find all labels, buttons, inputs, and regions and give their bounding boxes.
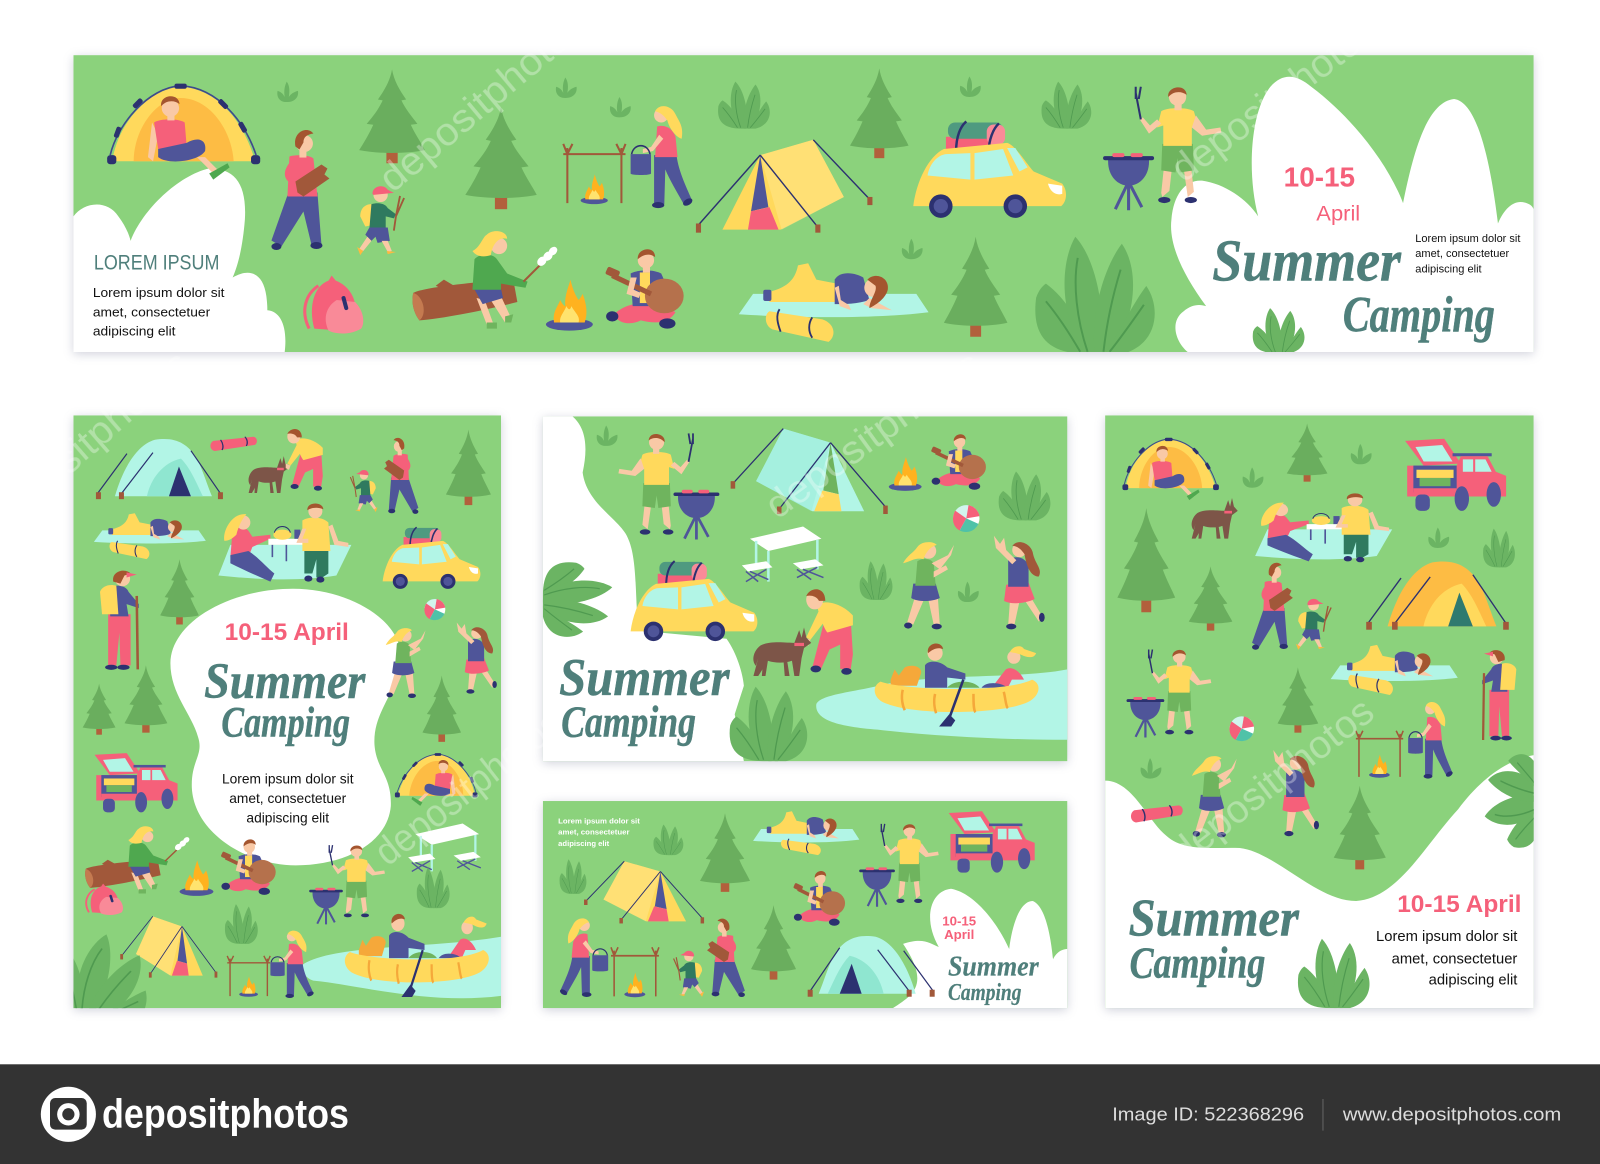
heading: lorem ipsum: LOREM IPSUM: [94, 250, 219, 274]
tuft: [960, 77, 981, 97]
body text: [222, 772, 354, 825]
tuft: [902, 239, 923, 259]
river: [302, 937, 501, 998]
dog: [753, 628, 811, 676]
tree: [1117, 508, 1175, 612]
grill: [309, 888, 343, 924]
tree: [751, 905, 796, 980]
white corner blob: [893, 889, 1067, 1008]
cooking frame: [227, 956, 270, 997]
body text: Lorem ipsum dolor sit: [1376, 929, 1517, 945]
girl playing: [903, 542, 954, 629]
watermarks: depositphotos: [758, 343, 989, 528]
icon: camera logo: [41, 1087, 96, 1142]
red car: [1405, 439, 1506, 511]
watermarks: [0, 4, 1385, 874]
leaf: [1485, 754, 1541, 848]
title: Camping: Camping: [221, 700, 350, 747]
ball: [953, 505, 980, 532]
bush: [653, 824, 683, 855]
tuft: [277, 82, 298, 102]
woman with pot: [1408, 702, 1454, 779]
man with guitar: [221, 839, 276, 895]
hiker: [100, 571, 139, 670]
ball: [424, 599, 445, 620]
red bag: [1131, 805, 1183, 822]
tuft: [597, 426, 618, 446]
footer bar: [0, 1064, 1600, 1164]
campfire: [180, 860, 213, 896]
title: Summer: Summer: [559, 649, 731, 707]
man with guitar: [931, 434, 986, 490]
title: Camping: Camping: [561, 697, 696, 747]
tree: [446, 430, 491, 505]
woman lying on mat: [739, 263, 929, 317]
tree: [1334, 786, 1386, 869]
cooking frame: [611, 947, 659, 997]
tree: [160, 559, 199, 624]
man with fork: [1136, 87, 1221, 203]
ball: [1230, 716, 1254, 741]
tuft: [556, 78, 577, 98]
body text: amet, consectetuer: [229, 791, 347, 806]
title: Camping: Camping: [1343, 288, 1495, 344]
red car: [949, 811, 1035, 873]
watermarks: depositphotos: [371, 4, 594, 201]
tree: [124, 665, 167, 733]
picnic couple: [218, 504, 351, 583]
man with fork: [881, 824, 939, 903]
panel: top banner: [73, 55, 1534, 354]
white centre blob: [170, 589, 400, 865]
date: [942, 914, 976, 942]
fire: [889, 457, 922, 491]
tuft: [1351, 444, 1372, 464]
tree: [850, 68, 909, 158]
text block: right: [1415, 233, 1520, 275]
girl on log with marshmallows: [412, 231, 559, 329]
text block: right: adipiscing elit: [1415, 263, 1482, 275]
girl playing: [1192, 756, 1237, 837]
tuft: [958, 582, 979, 602]
boy: [674, 951, 704, 997]
man carrying logs: [271, 130, 329, 250]
water: [816, 669, 1067, 740]
red car: [95, 753, 178, 812]
website: www.depositphotos.com: [1342, 1103, 1561, 1124]
panel shadows: [73, 57, 1534, 1010]
tree: [465, 107, 537, 209]
picnic couple: [1255, 493, 1392, 562]
small text: adipiscing elit: [558, 839, 610, 848]
raft: [345, 914, 489, 997]
cooking frame with fire: [563, 144, 626, 204]
raft: [875, 644, 1039, 727]
leaf: [543, 562, 612, 637]
icon: dome tent with person: [107, 84, 260, 180]
backpack: [86, 884, 123, 915]
small text: [558, 816, 640, 848]
sleeping bag: [766, 309, 833, 342]
girl playing: [457, 622, 497, 694]
tree: [83, 684, 116, 735]
watermarks: depositphotos: [1163, 690, 1382, 874]
body text: amet, consectetuer: [1392, 951, 1517, 967]
date: 10-15 April: [1397, 891, 1521, 918]
tree: [359, 69, 425, 163]
date: 10-15: [1284, 162, 1355, 193]
tree: [1287, 423, 1327, 482]
body text: adipiscing elit: [1429, 973, 1517, 989]
cooking frame: [1356, 731, 1403, 778]
girl on log: [85, 826, 191, 894]
bush: [718, 82, 770, 129]
girl playing: [386, 628, 426, 698]
text block: left: adipiscing elit: [93, 324, 176, 339]
tree: [422, 676, 461, 742]
panel: middle bottom: [543, 801, 1067, 1008]
table and chairs: [742, 527, 823, 582]
orange dome tent: [1366, 562, 1509, 630]
man with fork: [618, 433, 693, 535]
white bottom wave: [1105, 755, 1534, 1008]
title: Camping: Camping: [948, 979, 1021, 1006]
girl playing: [994, 536, 1045, 629]
panel: left poster: [73, 415, 501, 1008]
white blob: right title area: [1171, 77, 1534, 352]
dog: [249, 456, 289, 493]
man with logs: [1252, 563, 1293, 650]
bush on white: [1253, 308, 1304, 353]
date: 10-15 April: [225, 619, 349, 646]
tree: [1278, 667, 1318, 733]
body text: Lorem ipsum dolor sit: [222, 772, 354, 787]
text block: left: amet, consectetuer: [93, 304, 211, 319]
logo wordmark: depositphotos: [102, 1091, 349, 1137]
man with logs: [384, 438, 418, 514]
image id: Image ID: 522368296: [1112, 1103, 1304, 1124]
yellow ridge tent: [120, 916, 217, 978]
man bending: [286, 429, 323, 491]
large bush: [1035, 237, 1155, 354]
yellow car: [383, 527, 480, 589]
campfire: [546, 280, 593, 331]
girl playing: [1273, 750, 1319, 836]
man with fork: [329, 845, 385, 917]
tuft: [1243, 467, 1263, 488]
mint dome tent: [808, 936, 935, 997]
yellow bag: [109, 541, 149, 559]
month: April: [1316, 201, 1360, 225]
text block: right: amet, consectetuer: [1415, 248, 1510, 260]
boy: [1296, 599, 1331, 650]
tree: [944, 237, 1007, 337]
body text: [1376, 929, 1517, 989]
yellow car: [631, 561, 757, 641]
title: Summer: Summer: [1129, 890, 1300, 948]
text block: left: [93, 285, 225, 339]
woman on mat: [753, 811, 859, 842]
title: Summer: Summer: [204, 654, 366, 710]
bush: [860, 561, 892, 600]
dome tent with person: [1122, 438, 1219, 500]
bush: [1483, 529, 1515, 567]
red sleeping bag: [210, 437, 257, 451]
bush: [1041, 82, 1091, 129]
woman with pot: [631, 106, 694, 208]
text block: left: Lorem ipsum dolor sit: [93, 285, 225, 300]
text block: right: Lorem ipsum dolor sit: [1415, 233, 1520, 245]
man with guitar: [793, 871, 845, 926]
panel: right poster: [1105, 415, 1541, 1008]
tree: [1189, 566, 1232, 631]
tuft: [610, 97, 631, 117]
body text: adipiscing elit: [246, 810, 329, 825]
small text: Lorem ipsum dolor sit: [558, 816, 640, 825]
boy: [350, 470, 378, 512]
woman with pot: [270, 931, 315, 998]
man with logs: [707, 919, 745, 997]
bag: [1348, 673, 1393, 695]
white blob: left text area: [73, 168, 285, 352]
white side area: [543, 416, 744, 761]
yellow ridge tent: [584, 861, 704, 923]
bush: [560, 859, 586, 894]
mint dome tent: [96, 439, 223, 499]
man bending: [804, 589, 853, 675]
mint ridge tent: [731, 429, 888, 514]
watermarks: depositphotos: [367, 702, 570, 874]
corner bush: [42, 920, 166, 1036]
boy with sticks: [357, 186, 404, 255]
man with guitar: [605, 249, 684, 329]
grill: [1127, 697, 1164, 738]
date: 10-15: [942, 914, 976, 929]
title: Summer: Summer: [948, 952, 1040, 983]
yellow car: [913, 121, 1066, 218]
backpack: [305, 276, 363, 333]
hiker: [1482, 650, 1516, 740]
tuft: [1428, 528, 1449, 548]
man with fork: [1149, 649, 1211, 734]
woman on mat: [94, 513, 206, 543]
table and chairs: [408, 823, 481, 871]
title: Summer: Summer: [1212, 228, 1402, 294]
bush: [999, 471, 1050, 520]
small text: amet, consectetuer: [558, 828, 630, 837]
bag: [781, 839, 821, 855]
yellow ridge tent: [696, 140, 872, 233]
bush: [1298, 939, 1370, 1008]
dome tent with person: [395, 753, 478, 806]
woman on mat: [1331, 645, 1458, 681]
tree: [700, 813, 750, 892]
large bush: [730, 687, 807, 761]
grill: [673, 490, 719, 540]
date: April: [944, 927, 974, 942]
watermarks: depositphotos: [1163, 9, 1385, 191]
grill: [859, 867, 895, 907]
bush: [417, 867, 450, 908]
barbecue grill: [1103, 153, 1154, 210]
panel: middle top: [543, 416, 1067, 761]
bush: [225, 904, 258, 944]
woman with pot: [559, 918, 608, 997]
dog: [1192, 498, 1238, 539]
tuft: [1141, 758, 1161, 779]
title: Camping: Camping: [1130, 938, 1265, 988]
